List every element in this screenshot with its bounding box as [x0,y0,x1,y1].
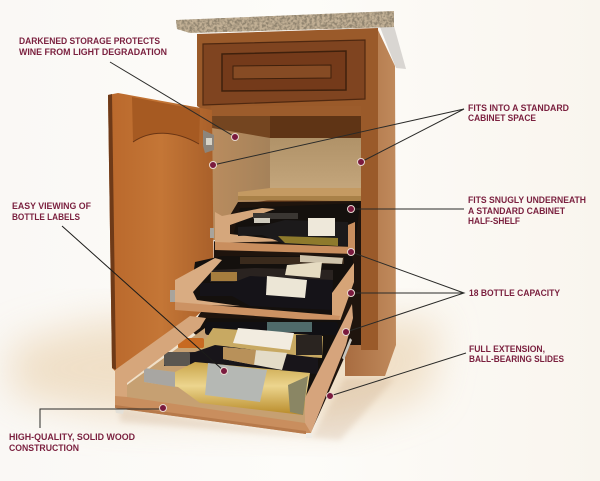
middle drawer side wing [175,258,240,306]
wooden floor [10,320,440,425]
label: half-shelf [468,195,586,227]
label: solid wood: HIGH-QUALITY, SOLID WOOD [9,432,135,443]
label: half-shelf: A STANDARD CABINET [468,206,565,217]
dark bottle [164,345,318,374]
label: solid wood: CONSTRUCTION [9,443,79,454]
cabinet [176,11,406,430]
slide rail [342,338,352,360]
label: standard cabinet space: FITS INTO A STANDARD [468,103,569,114]
label: easy viewing: EASY VIEWING OF [12,201,91,212]
label: ball-bearing slides: BALL-BEARING SLIDES [469,354,564,365]
middle drawer front rail [175,302,340,322]
middle drawer rear bottles [210,255,344,282]
label: easy viewing [12,201,91,223]
leader: standard cabinet space [213,109,464,165]
top drawer side wing [215,208,290,243]
label: ball-bearing slides: FULL EXTENSION, [469,344,545,355]
cabinet side panel [345,30,396,376]
label: darkened storage [19,36,167,58]
top drawer [210,203,360,254]
leader: 18 bottle capacity [346,252,464,332]
countertop [176,11,406,69]
floor shadow [120,378,395,440]
cabinet dark cavity [190,201,361,430]
middle drawer front bottle [200,276,333,310]
bottom drawer front rail [115,396,311,434]
back dark bottle [205,322,338,335]
white wine bottle [144,362,310,415]
bottom drawer right wing [305,304,353,433]
cabinet front frame [197,28,378,350]
label: half-shelf: HALF-SHELF [468,216,520,227]
top drawer bottle [238,213,348,246]
middle drawer [170,255,354,322]
label: half-shelf: FITS SNUGLY UNDERNEATH [468,195,586,206]
marker dots [160,134,364,412]
label: standard cabinet space [468,103,569,124]
door [108,93,214,372]
leader: ball-bearing slides [330,353,466,396]
cabinet interior [212,116,361,240]
half shelf [238,188,361,201]
top drawer front rail [215,242,355,254]
orange capsule bottle [178,328,323,358]
bottom drawer [115,304,353,438]
bottom drawer left wing [115,316,206,399]
leader: half-shelf [351,208,464,210]
label: ball-bearing slides [469,344,564,365]
label: standard cabinet space: CABINET SPACE [468,113,536,124]
drawer front [203,40,365,105]
label: darkened storage: DARKENED STORAGE PROTECTS [19,36,160,47]
icon: hinge [203,130,214,153]
leader: solid wood [40,409,163,428]
label: 18 bottle capacity: 18 BOTTLE CAPACITY [469,288,561,299]
label: darkened storage: WINE FROM LIGHT DEGRADATION [19,47,167,58]
leader: darkened storage [110,62,235,137]
label: solid wood [9,432,135,454]
leader: easy viewing [62,226,224,371]
label: easy viewing: BOTTLE LABELS [12,212,80,223]
